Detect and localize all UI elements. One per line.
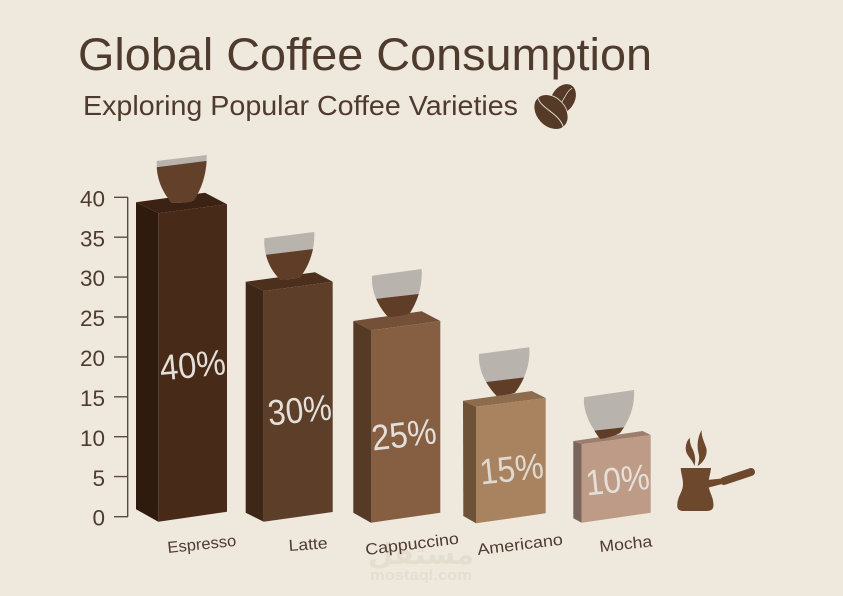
bar: Mocha [573,431,651,523]
subtitle: Exploring Popular Coffee Varieties [83,90,518,121]
category labels: Cappuccino [364,531,460,559]
bar: Espresso [136,193,227,522]
bar: Latte [246,272,333,522]
watermark: مستقل [368,537,474,571]
y axis [80,186,128,530]
y axis labels: 35 [80,226,105,252]
y axis labels: 10 [80,426,105,451]
y axis labels [80,186,105,530]
y axis labels: 5 [92,466,105,491]
watermark: mostaql.com [370,567,472,584]
bar: Cappuccino [353,311,440,523]
y axis labels: 30 [80,266,105,291]
category labels: Americano [476,532,564,559]
y axis labels: 20 [80,346,105,371]
icon: coffee beans [527,79,581,136]
title: Global Coffee Consumption [78,29,652,80]
y axis labels: 40 [80,186,105,212]
icon: coffee pot [677,430,751,511]
percent: 15%: 15% [478,445,545,492]
cup: Cappuccino [372,269,422,318]
y axis labels: 25 [80,306,105,331]
percent: 40%: 40% [158,341,227,388]
category labels: Espresso [167,533,237,557]
percent: 10%: 10% [584,456,651,503]
percent: 25%: 25% [369,410,438,458]
category labels: Latte [288,535,328,555]
cup: Mocha [584,390,634,439]
category labels [167,531,653,559]
percent: 30%: 30% [266,387,333,433]
y axis labels: 15 [80,386,105,411]
category labels: Mocha [599,534,653,556]
bar: Americano [463,391,546,523]
cup: Latte [264,232,314,280]
cup: Americano [478,347,530,396]
y axis labels: 0 [92,506,105,530]
steam [686,438,695,466]
cup: Espresso [156,155,207,203]
